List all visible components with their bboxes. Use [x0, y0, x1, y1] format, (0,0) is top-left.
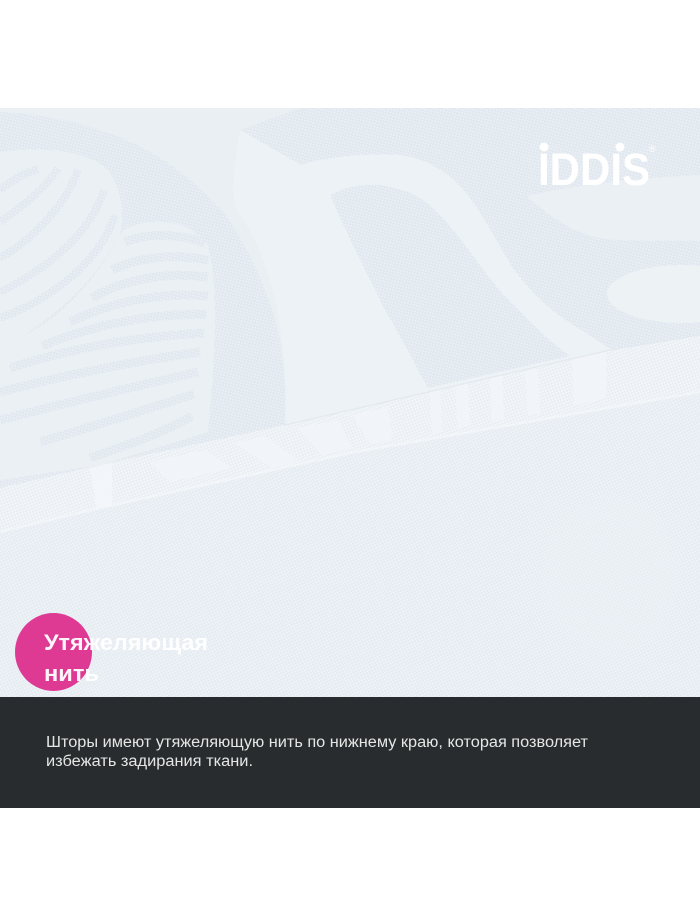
infographic canvas [0, 108, 700, 808]
light oval [607, 265, 700, 323]
petal veins right [0, 235, 208, 458]
hem with weighted thread [0, 335, 700, 532]
caption text [46, 734, 588, 770]
heading [44, 630, 208, 686]
logo: IDDIS: IDDIS [538, 144, 650, 195]
caption text: избежать задирания ткани. [46, 753, 253, 770]
light band above leaf [0, 108, 298, 390]
hem bright seam [0, 392, 700, 532]
heading: Утяжеляющая [44, 630, 208, 655]
hem stripes [90, 376, 502, 506]
logo: IDDIS: ® [649, 144, 656, 154]
light petal right [0, 221, 215, 480]
woven fabric base [0, 108, 700, 488]
light arch and column [285, 154, 610, 422]
lower fabric [0, 390, 700, 697]
inner woven panel [330, 185, 570, 388]
pink circle accent [15, 613, 92, 691]
caption text: Шторы имеют утяжеляющую нить по нижнему краю, которая позволяет [46, 734, 588, 751]
heading: нить [44, 661, 99, 686]
fabric photo [0, 108, 700, 697]
soft lower shape [540, 495, 680, 655]
light petal left [0, 150, 122, 350]
petal veins left [0, 168, 115, 318]
dark caption band [0, 697, 700, 808]
upper light blotch [527, 175, 700, 241]
